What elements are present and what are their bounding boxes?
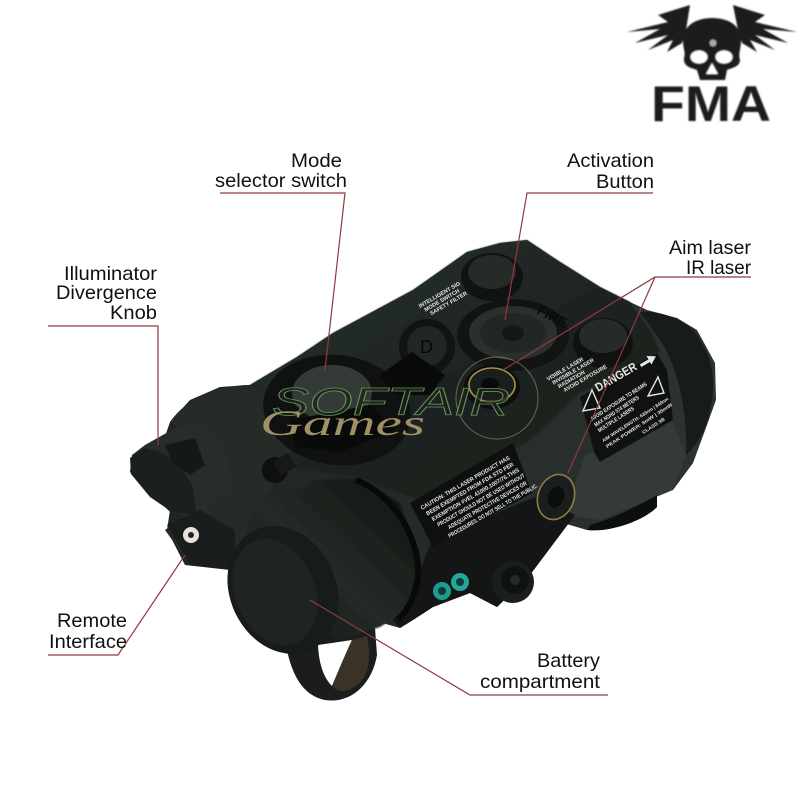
label: small laser warning text: RADIATION <box>557 370 586 390</box>
icon: skull forehead dot <box>710 40 716 46</box>
device: D lever switch <box>380 319 455 395</box>
callout: Aim laser / IR laser: IR laser <box>686 257 751 279</box>
label: danger plate: DANGER <box>592 359 640 395</box>
label: caution plate: PRODUCT SHOULD NOT BE USED WITHOUT <box>437 473 527 528</box>
label: danger plate: PEAK POWER: 5mW | 35mW <box>605 402 674 449</box>
device: illuminator knob housing <box>165 385 300 570</box>
callout: Activation Button: Button <box>596 171 654 193</box>
label: upper small text: MODE SWITCH <box>424 288 461 313</box>
device: round side connector <box>492 561 534 603</box>
callout: Illuminator Divergence Knob: Illuminator <box>64 263 158 285</box>
label: danger plate: AIM WAVELENGTH: 635nm | 840nm <box>601 396 669 443</box>
callout: Battery compartment: compartment <box>480 671 601 693</box>
label: danger plate: AVOID EXPOSURE TO BEAMS <box>590 382 649 423</box>
label: small laser warning text <box>546 348 609 398</box>
icon: skull <box>683 18 741 80</box>
callout: Activation Button: Activation <box>567 150 654 172</box>
device: activation button <box>457 299 569 371</box>
device: gold ring port <box>464 365 520 409</box>
device: strap ring <box>285 625 377 701</box>
icon: right wing <box>733 5 797 52</box>
logo wordmark: FMA <box>651 76 771 132</box>
device: illuminator divergence knob <box>130 425 232 518</box>
label: small laser warning text: INVISIBLE LASER <box>552 358 595 386</box>
device: teal screws <box>433 573 469 600</box>
label: FIRE embossed: FIRE <box>535 302 570 331</box>
callout: Aim laser / IR laser <box>503 237 751 473</box>
device: main body silhouette <box>150 240 716 628</box>
watermark: SOFTAIR Games <box>260 357 538 443</box>
label: caution plate <box>410 443 539 547</box>
callout: Aim laser / IR laser: Aim laser <box>669 237 751 259</box>
device: end cap face <box>217 526 333 658</box>
device: D lever switch: D <box>420 337 433 357</box>
label: caution plate: PROCEDURES. DO NOT SELL TO THE PUBLIC. <box>448 483 539 540</box>
device: end cap collar <box>207 508 359 672</box>
icon: skull nose <box>706 63 718 74</box>
label: upper small text <box>418 281 469 320</box>
callout: Battery compartment: Battery <box>537 650 600 672</box>
logo: FMA winged skull <box>627 5 797 132</box>
device: lower right round button <box>573 318 633 368</box>
device: side screw <box>262 453 296 483</box>
device: laser unit photo illustration <box>130 240 716 701</box>
device: foot shadow <box>587 495 657 530</box>
icon: skull eye right <box>716 50 732 64</box>
label: upper small text: INTELLIGENT SIG <box>418 281 462 310</box>
device: remote interface port <box>167 510 235 570</box>
label: upper small text: SAFETY FILTER <box>429 291 469 317</box>
device: underside bracket <box>393 495 575 628</box>
label: caution plate: EXEMPTION #VEL 41000.1007/76.THIS <box>431 468 521 523</box>
device: barrel ring <box>356 480 418 620</box>
callout: Illuminator Divergence Knob <box>48 263 158 445</box>
callout: Illuminator Divergence Knob: Divergence <box>56 282 157 304</box>
label: small laser warning text: VISIBLE LASER <box>546 357 585 383</box>
watermark: ring <box>456 357 538 439</box>
callout: Mode selector switch <box>215 150 347 370</box>
callout: Remote Interface <box>48 555 185 655</box>
label: caution plate: BEEN EXEMPTED FROM FDA STD PER <box>426 462 516 517</box>
label: danger plate: MAX NOHD 574 METERS <box>594 395 641 429</box>
callout: Battery compartment <box>310 600 608 695</box>
device: side gold ring port <box>531 469 581 525</box>
callout: Mode selector switch: selector switch <box>215 170 347 192</box>
callout: Activation Button <box>505 150 654 320</box>
label: danger plate <box>580 348 678 462</box>
watermark: SOFTAIR wordmark: SOFTAIR <box>272 381 510 424</box>
callout: Mode selector switch: Mode <box>291 150 342 172</box>
device: upper round button <box>461 253 523 301</box>
callout: Remote Interface: Remote <box>57 610 127 632</box>
device: right end cover <box>640 312 713 455</box>
callout: Illuminator Divergence Knob: Knob <box>110 302 157 324</box>
watermark: Games script: Games <box>260 403 425 443</box>
device: right side shade <box>565 420 686 520</box>
label: danger plate: CLASS 3B <box>641 416 666 435</box>
label: caution plate: ADEQUATE PROTECTIVE DEVICES OR <box>447 481 529 531</box>
device: mode selector dial <box>256 345 418 475</box>
label: small laser warning text: AVOID EXPOSURE <box>563 364 609 394</box>
icon: skull eye left <box>690 50 708 64</box>
device: barrel <box>250 478 420 642</box>
label: caution plate: CAUTION: THIS LASER PRODUCT HAS <box>420 455 511 512</box>
label: danger plate: MULTIPLE LASERS <box>597 406 636 434</box>
icon: left wing <box>627 5 690 52</box>
callout: Remote Interface: Interface <box>49 631 127 653</box>
device: top face <box>225 240 660 500</box>
